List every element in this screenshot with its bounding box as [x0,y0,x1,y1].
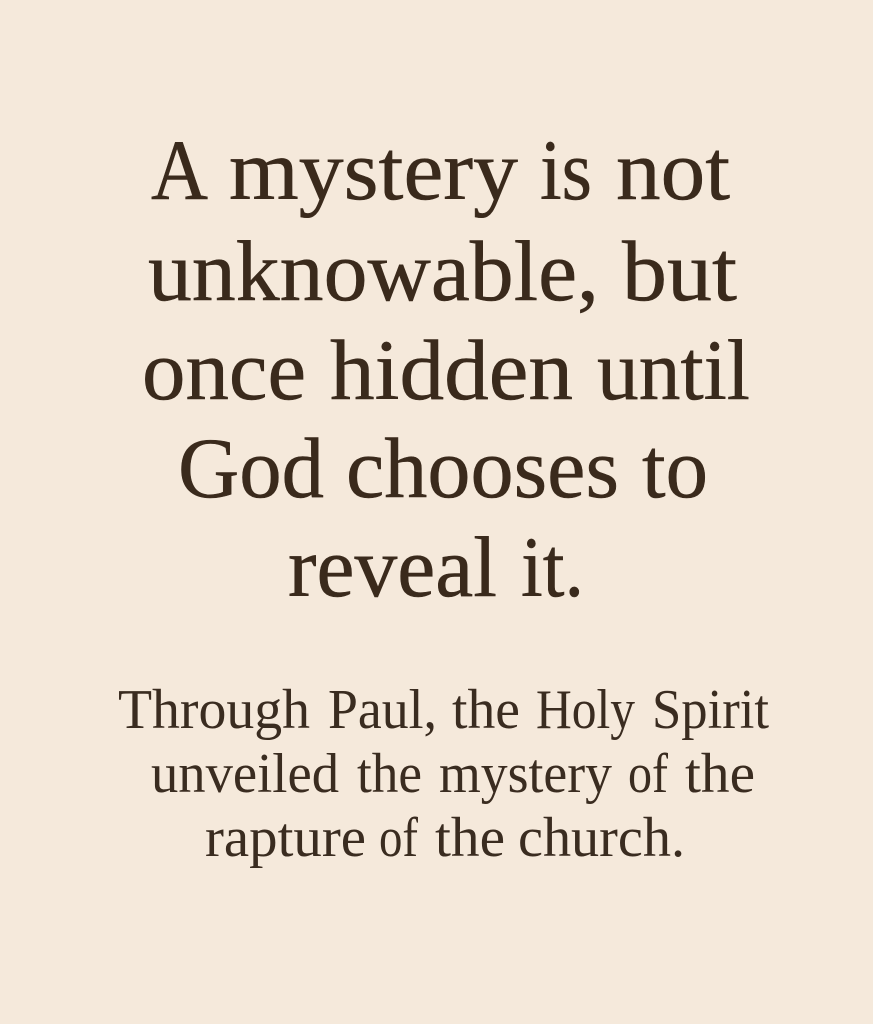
text block: Paul and the rapture [118,679,769,869]
text block: Paul and the rapture: rapture [205,807,366,869]
text block: Paul and the rapture: of [379,807,418,869]
text block: Paul and the rapture: mystery [439,743,612,805]
heading: mystery statement: unknowable, [148,223,599,319]
heading: mystery statement: but [622,223,737,319]
heading: mystery statement: chooses [346,420,619,516]
text block: Paul and the rapture: church. [518,807,685,869]
heading: mystery statement: A [151,122,208,218]
text block: Paul and the rapture: the [685,743,755,805]
heading: mystery statement: God [178,420,324,516]
heading: mystery statement: until [597,322,750,418]
heading: mystery statement: not [616,122,730,218]
text block: Paul and the rapture: Paul, [328,679,437,741]
heading: mystery statement: is [540,122,592,218]
heading: mystery statement: mystery [229,122,518,218]
heading: mystery statement: to [642,420,708,516]
text block: Paul and the rapture: unveiled [151,743,339,805]
heading: mystery statement: reveal [288,519,497,615]
text block: Paul and the rapture: Through [118,679,310,741]
text block: Paul and the rapture: the [435,807,505,869]
text block: Paul and the rapture: of [628,743,668,805]
heading: mystery statement: it. [521,519,584,615]
heading: mystery statement: hidden [330,322,573,418]
text block: Paul and the rapture: the [357,743,422,805]
text block: Paul and the rapture: the [452,679,520,741]
heading: mystery statement: once [142,322,306,418]
text block: Paul and the rapture: Spirit [652,679,769,741]
text block: Paul and the rapture: Holy [536,679,635,741]
heading: mystery statement [142,122,750,615]
